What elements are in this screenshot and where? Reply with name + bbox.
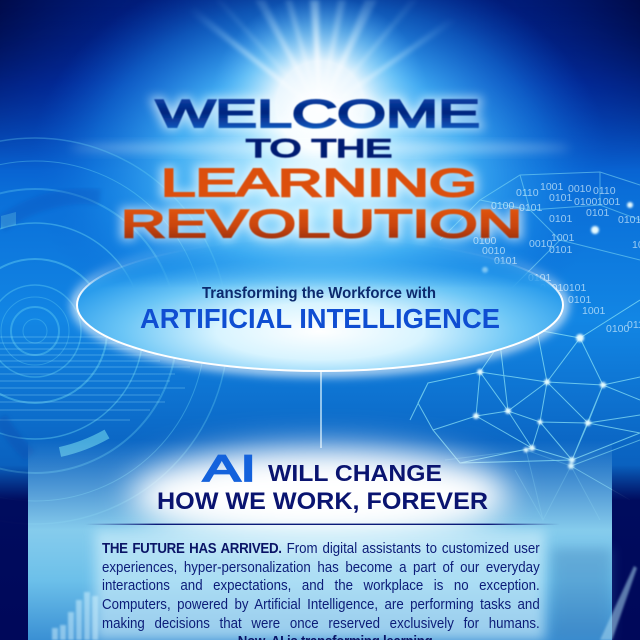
title — [121, 93, 522, 246]
binary digits: 1001 — [540, 181, 564, 193]
horizontal flare — [70, 143, 570, 153]
oval body — [77, 239, 563, 371]
binary digits: 0101 — [563, 282, 587, 294]
body paragraph: THE FUTURE HAS ARRIVED. From digital assistants to customized user — [102, 541, 540, 557]
oval heading: ARTIFICIAL INTELLIGENCE — [140, 303, 500, 334]
title line: learning: LEARNING — [161, 162, 477, 205]
network of connected nodes — [410, 172, 640, 520]
binary digits: 1001 — [551, 232, 575, 244]
binary digits: 0100 — [574, 196, 598, 208]
binary digits: 1001 — [582, 305, 606, 317]
binary digits: 1001 — [597, 196, 621, 208]
binary digits: 0101 — [568, 294, 592, 306]
light rays — [172, 0, 459, 112]
oval glow — [76, 238, 564, 372]
binary digits: 0101 — [519, 202, 543, 214]
title glow: WELCOME — [155, 93, 481, 136]
binary digits: 0010 — [568, 183, 592, 195]
title glow — [120, 93, 523, 246]
light text backing — [95, 530, 545, 640]
binary digits: 0101 — [494, 255, 518, 267]
body paragraph: interactions and expectations, and the workplace is no exception. — [102, 578, 540, 594]
divider rule — [85, 524, 560, 525]
binary digits: 0110 — [593, 185, 616, 197]
binary digits: 0101 — [549, 213, 573, 225]
oval subtitle: Transforming the Workforce with — [202, 285, 436, 302]
title line: to the: TO THE — [246, 135, 392, 163]
title glow: LEARNING — [160, 162, 478, 205]
dark side strips — [0, 465, 640, 640]
binary digits: 0100 — [473, 235, 497, 247]
binary digits: 0110 — [516, 187, 539, 199]
body paragraph: Computers, powered by Artificial Intelligence, are performing tasks and — [102, 597, 540, 613]
dark top corners — [0, 0, 640, 170]
blurred backdrop right — [552, 548, 612, 640]
title line: welcome: WELCOME — [156, 93, 480, 136]
binary digits — [473, 181, 640, 335]
title line: revolution: REVOLUTION — [121, 203, 522, 246]
white burst core — [210, 0, 430, 215]
binary digits: 0100 — [606, 323, 630, 335]
binary digits: 0101 — [586, 207, 610, 219]
binary digits: 0101 — [540, 282, 564, 294]
binary digits: 0101 — [549, 244, 573, 256]
heading line one: WILL CHANGE — [268, 460, 442, 486]
binary digits: 0010 — [529, 238, 553, 250]
left HUD rings and lines — [0, 138, 228, 524]
section heading — [157, 448, 488, 515]
connector line — [320, 372, 322, 448]
binary digits: 0101 — [528, 272, 552, 284]
bottom right light beam — [600, 566, 637, 640]
body paragraph: experiences, hyper-personalization has become a part of our everyday — [102, 560, 540, 576]
binary digits: 0010 — [482, 245, 506, 257]
oval badge — [76, 238, 564, 372]
heading line two: HOW WE WORK, FOREVER — [157, 488, 488, 515]
glowing network nodes — [473, 202, 633, 469]
body paragraph — [102, 541, 540, 640]
faint bar chart — [52, 592, 98, 640]
title glow: REVOLUTION — [120, 203, 523, 246]
binary digits: 0100 — [491, 200, 515, 212]
AI letters: AI — [203, 448, 256, 489]
binary digits: 0101 — [549, 192, 573, 204]
white heading glow — [130, 447, 510, 543]
lower content panel — [28, 440, 637, 640]
body paragraph: making decisions that were once reserved exclusively for humans. — [102, 616, 540, 632]
